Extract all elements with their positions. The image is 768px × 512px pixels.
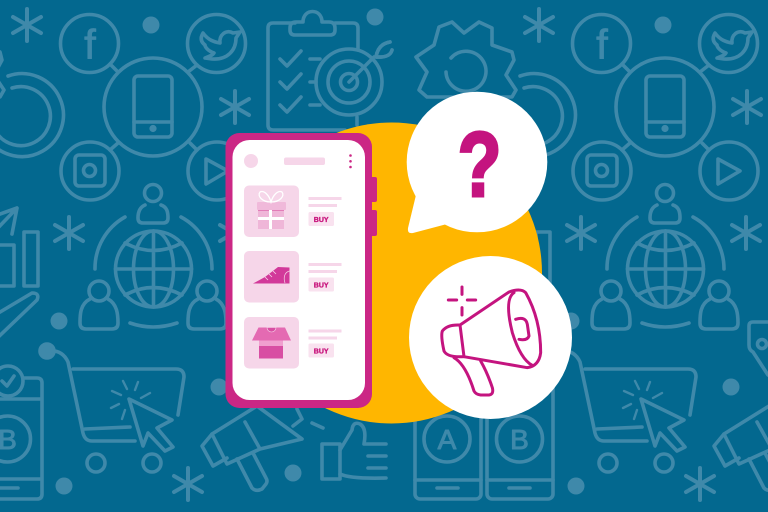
- megaphone badge: [409, 256, 572, 419]
- decorative dots: [562, 16, 740, 494]
- buy button: BUY: [314, 282, 329, 289]
- icon: gear: [416, 22, 516, 97]
- icon: map pin fragment: [749, 322, 768, 375]
- decorative dots: [50, 8, 384, 494]
- phone screen: [232, 140, 365, 400]
- phone body: [226, 133, 372, 408]
- decorative asterisks: [525, 9, 761, 500]
- icon: social network hub: f: [596, 21, 608, 68]
- question mark: ?: [458, 113, 501, 216]
- icon: phone B: [487, 378, 553, 499]
- product row: gift: [244, 186, 342, 237]
- buy button: BUY: [314, 348, 329, 355]
- background icon pattern: right tile: [376, 9, 768, 500]
- background icon pattern: left tile: [0, 8, 392, 500]
- icon: gift box: [257, 192, 286, 229]
- icon: open box: [252, 328, 291, 358]
- icon: phone A: A: [438, 424, 457, 455]
- icon: megaphone outline: [714, 406, 768, 490]
- icon: social network hub: f: [84, 21, 96, 68]
- speech bubble with question mark: [407, 92, 547, 233]
- decorative asterisks: [13, 9, 249, 500]
- yellow circle: [241, 122, 542, 424]
- icon: phone A: [415, 378, 481, 499]
- icon: shopping cart with cursor: [40, 344, 184, 472]
- icon: progress ring: [0, 74, 63, 157]
- icon: progress ring: [500, 74, 575, 157]
- icon: phone B with badge: [0, 366, 42, 499]
- icon: clipboard with target: [268, 12, 392, 130]
- icon: shopping cart with cursor: [552, 344, 696, 472]
- icon: social network hub: [572, 14, 758, 200]
- icon: bar chart: [536, 232, 550, 290]
- icon: megaphone outline: [202, 406, 323, 490]
- icon: bar chart with arrow: [0, 208, 38, 345]
- icon: social network hub: [60, 14, 246, 200]
- icon: sneaker: [253, 267, 290, 284]
- icon: people around globe: [592, 184, 738, 329]
- phone side buttons: [368, 177, 377, 236]
- icon: people around globe: [80, 184, 226, 329]
- product row: open box: [244, 317, 342, 368]
- icon: gear: [0, 22, 4, 97]
- buy button: BUY: [314, 217, 329, 224]
- icon: phone B: B: [510, 424, 529, 455]
- app header: [244, 154, 352, 168]
- phone illustration: [226, 133, 377, 408]
- icon: megaphone: [442, 287, 541, 395]
- icon: thumbs up: [322, 423, 386, 479]
- product row: shoe: [244, 251, 342, 302]
- icon: clipboard arrow feather: [376, 42, 392, 57]
